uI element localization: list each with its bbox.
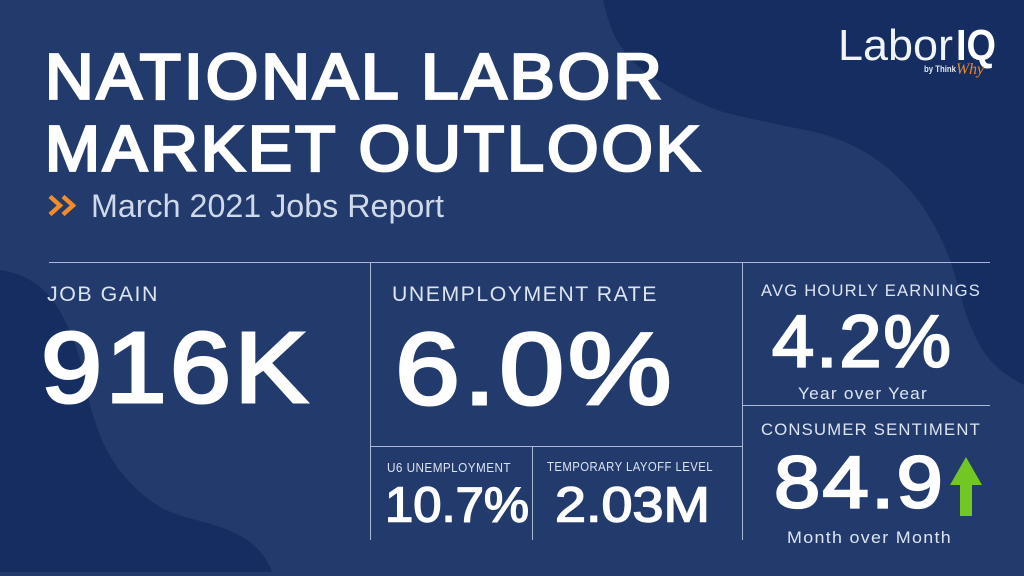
logo: LaborIQ by ThinkWhy: Why bbox=[956, 61, 985, 78]
panel: consumer sentiment: 84.9 bbox=[774, 442, 945, 524]
icon: green up arrow bbox=[950, 457, 982, 516]
subtitle: March 2021 Jobs Report bbox=[91, 188, 444, 224]
panel: average hourly earnings: 4.2% bbox=[772, 302, 953, 382]
panel: unemployment rate: 6.0% bbox=[395, 312, 675, 426]
panel: job gain: 916K bbox=[41, 312, 311, 424]
panel: U6 unemployment: U6 UNEMPLOYMENT bbox=[387, 460, 511, 475]
panel: job gain: JOB GAIN bbox=[47, 283, 159, 306]
panel: temporary layoff level bbox=[547, 459, 713, 532]
icon: orange chevrons bbox=[50, 196, 73, 214]
panel: average hourly earnings: AVG HOURLY EARNINGS bbox=[761, 282, 981, 300]
logo: LaborIQ by ThinkWhy: Labor bbox=[838, 21, 953, 70]
background blob: bottom left bbox=[0, 270, 272, 572]
panel: consumer sentiment: CONSUMER SENTIMENT bbox=[761, 421, 981, 439]
logo: LaborIQ by ThinkWhy: by Think bbox=[924, 64, 957, 75]
panel: temporary layoff level: 2.03M bbox=[555, 478, 710, 532]
panel: consumer sentiment bbox=[761, 421, 982, 547]
background blob: top right bbox=[603, 0, 1024, 385]
panel: consumer sentiment: Month over Month bbox=[787, 529, 952, 547]
logo: LaborIQ by ThinkWhy bbox=[838, 21, 996, 78]
panel: average hourly earnings bbox=[761, 282, 981, 403]
panel: unemployment rate: UNEMPLOYMENT RATE bbox=[392, 283, 658, 306]
title: NATIONAL LABOR bbox=[45, 40, 665, 112]
panel: unemployment rate bbox=[392, 283, 675, 426]
panel: U6 unemployment: 10.7% bbox=[385, 478, 529, 532]
title: MARKET OUTLOOK bbox=[45, 112, 703, 184]
title bbox=[45, 40, 703, 184]
panel: temporary layoff level: TEMPORARY LAYOFF LEVEL bbox=[547, 459, 713, 474]
panel: average hourly earnings: Year over Year bbox=[798, 385, 928, 403]
logo: LaborIQ by ThinkWhy: IQ bbox=[956, 21, 996, 70]
